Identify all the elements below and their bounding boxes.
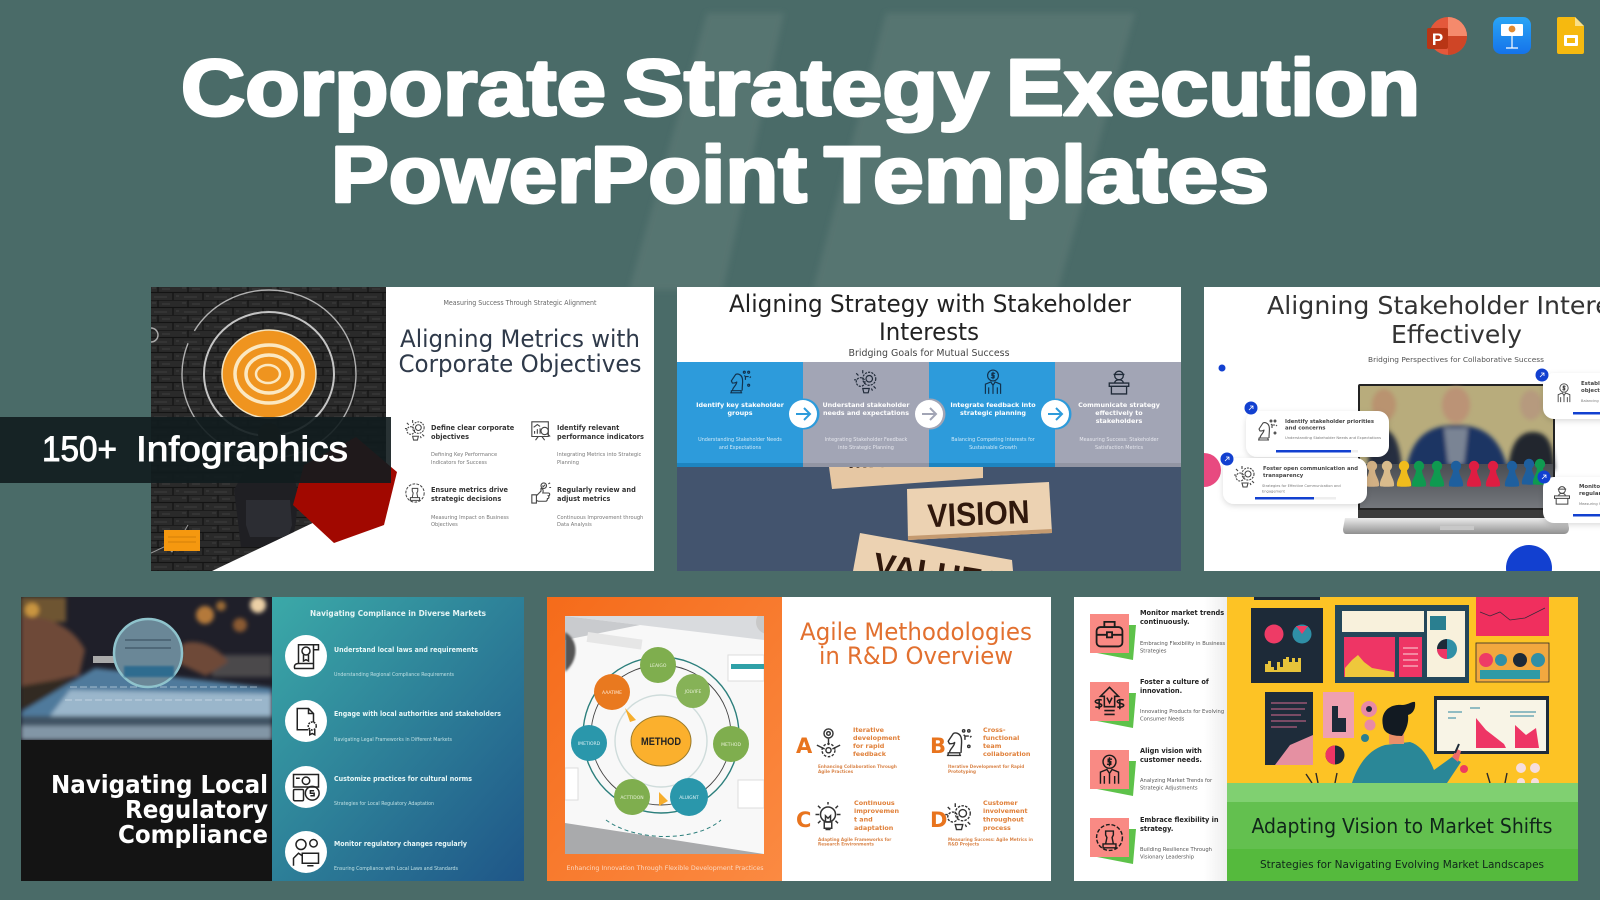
card: identify priorities: and concerns — [1285, 426, 1326, 432]
item 1 — [1090, 609, 1225, 660]
caption: Enhancing Innovation Through Flexible Development Practices — [566, 865, 764, 872]
item D: R&D Projects — [948, 842, 980, 846]
item: review metrics — [532, 483, 643, 528]
decorative dots — [1204, 364, 1552, 571]
step 4: effectively to — [1095, 409, 1143, 417]
item D: Measuring Success: Agile Metrics in — [948, 837, 1033, 842]
title block: Navigating Local — [51, 770, 268, 799]
card: identify priorities: Identify stakeholder priorities — [1285, 419, 1374, 425]
step 1 — [677, 362, 803, 467]
item 2 — [1090, 678, 1224, 728]
item 1: Monitor market trends — [1140, 609, 1224, 617]
method diagram: ALUIGNT — [679, 795, 699, 801]
step 1: groups — [727, 409, 753, 417]
panel: Aligning Metrics card — [144, 287, 654, 571]
background: faint diagonal slashes — [629, 13, 1135, 290]
item: review metrics: adjust metrics — [557, 495, 610, 503]
step 1: and Expectations — [719, 445, 762, 451]
item C: Adapting Agile Frameworks for — [818, 837, 892, 842]
method diagram: AAATIME — [602, 690, 622, 696]
title block: Compliance — [118, 820, 268, 849]
heading: Corporate Objectives — [398, 350, 642, 378]
item A: Agile Practices — [818, 769, 854, 774]
photo: wooden blocks: MISSION — [847, 443, 949, 474]
card: foster communication: Strategies for Effective Communication and — [1262, 484, 1341, 488]
step 2: needs and expectations — [823, 409, 909, 417]
item: define objectives: Define clear corporate — [431, 424, 515, 432]
item A: feedback — [853, 750, 887, 758]
heading — [398, 325, 642, 378]
panel: Local Regulatory Compliance card — [21, 597, 524, 881]
item C: t and — [854, 816, 873, 824]
illustration: analytics dashboards — [1227, 597, 1578, 786]
photo: wooden blocks: VISION — [927, 493, 1030, 534]
photo: brick wall with target — [144, 287, 386, 571]
item: review metrics: Data Analysis — [557, 522, 592, 528]
item: ensure metrics: strategic decisions — [431, 495, 501, 503]
item C — [796, 799, 899, 846]
step 2 — [803, 362, 929, 467]
item 2: Foster a culture of — [1140, 678, 1209, 686]
title band: Strategies for Navigating Evolving Market Landscapes — [1260, 858, 1544, 871]
item 4: Monitor regulatory changes regularly — [334, 840, 468, 848]
item A: Iterative — [853, 726, 885, 734]
item D: Customer — [983, 799, 1018, 807]
heading — [800, 618, 1032, 670]
method diagram: ACTTIDON — [620, 795, 644, 801]
banner: 150+ Infographics: Infographics — [136, 430, 348, 469]
item D: involvement — [983, 807, 1028, 815]
method diagram: METHOD — [641, 736, 681, 748]
icon: Keynote — [1493, 17, 1531, 54]
card: foster communication: Foster open communication and — [1263, 466, 1358, 472]
icon: Google Slides — [1557, 17, 1584, 54]
item: identify indicators: Integrating Metrics into Strategic — [557, 452, 642, 458]
item D: throughout — [983, 816, 1024, 824]
item 1: continuously. — [1140, 618, 1190, 626]
step 2: Integrating Stakeholder Feedback — [825, 437, 908, 443]
item D: process — [983, 824, 1011, 832]
item C: improvemen — [854, 807, 899, 815]
method diagram: LEAIGO — [650, 663, 667, 669]
item 3: Customize practices for cultural norms — [334, 775, 472, 783]
item A: development — [853, 734, 900, 742]
item 3: Analyzing Market Trends for — [1140, 778, 1213, 784]
card: foster communication: transparency — [1263, 473, 1304, 479]
arrow 2 — [914, 398, 946, 430]
subtitle: Bridging Goals for Mutual Success — [848, 348, 1010, 359]
banner: 150+ Infographics — [0, 417, 391, 483]
badge — [1244, 402, 1258, 414]
item 4 — [285, 831, 468, 873]
compliance panel — [272, 597, 524, 881]
item: identify indicators — [532, 422, 644, 466]
badge — [1538, 470, 1550, 484]
card: monitor regularly — [1543, 477, 1600, 523]
item: review metrics: Regularly review and — [557, 486, 636, 494]
step 2: into Strategic Planning — [838, 445, 894, 451]
card: identify priorities — [1246, 411, 1389, 457]
panel: Aligning Stakeholder card — [1204, 287, 1600, 571]
item: identify indicators: Identify relevant — [557, 424, 619, 432]
item 4: Ensuring Compliance with Local Laws and Standards — [334, 866, 458, 872]
step 1: Understanding Stakeholder Needs — [698, 437, 782, 443]
icon: PowerPoint — [1427, 17, 1467, 55]
heading: in R&D Overview — [819, 642, 1013, 670]
title band: Adapting Vision to Market Shifts — [1252, 814, 1552, 838]
item 3: Strategies for Local Regulatory Adaptation — [334, 801, 434, 807]
card: foster communication — [1223, 458, 1367, 504]
item: identify indicators: performance indicators — [557, 433, 644, 441]
item 2: innovation. — [1140, 687, 1182, 695]
step 4: stakeholders — [1096, 417, 1142, 425]
item 4: Building Resilience Through — [1140, 847, 1212, 853]
method diagram: JOLVIFE — [684, 689, 702, 695]
item D — [930, 799, 1033, 846]
item: identify indicators: Planning — [557, 460, 579, 466]
method diagram: METHOD — [721, 742, 741, 748]
item B: Cross- — [983, 726, 1006, 734]
title: Strategy — [623, 43, 990, 132]
item A: Enhancing Collaboration Through — [818, 764, 897, 769]
step 1: Identify key stakeholder — [696, 401, 785, 409]
card: identify priorities: Understanding Stakeholder Needs and Expectations — [1285, 436, 1381, 440]
item C: Continuous — [854, 799, 895, 807]
method diagram: IMETIORD — [578, 741, 601, 747]
panel heading: Navigating Compliance in Diverse Markets — [310, 609, 486, 618]
heading: Aligning Metrics with — [400, 325, 640, 353]
item 1: Embracing Flexibility in Business — [1140, 641, 1225, 647]
title: PowerPoint — [331, 130, 807, 219]
step 3: Integrate feedback into — [950, 401, 1036, 409]
item A — [796, 726, 900, 774]
title: Templates — [824, 130, 1269, 219]
item 1: Understand local laws and requirements — [334, 646, 478, 654]
item C: Research Environments — [818, 842, 874, 846]
step 3: strategic planning — [960, 409, 1026, 417]
step 4: Satisfaction Metrics — [1095, 445, 1143, 451]
heading: Aligning Strategy with Stakeholder — [729, 290, 1131, 318]
title: Execution — [1006, 43, 1420, 132]
title: Corporate — [181, 43, 606, 132]
photo: magnifying glass — [21, 597, 272, 740]
photo: wooden blocks: VALUES — [871, 545, 1006, 602]
item: review metrics: Continuous Improvement through — [557, 515, 643, 521]
heading: Interests — [879, 318, 979, 346]
item: ensure metrics: Ensure metrics drive — [431, 486, 509, 494]
panel: Adapting Vision card — [1074, 597, 1578, 881]
arrow 1 — [788, 398, 820, 430]
icon: PowerPoint: P — [1432, 30, 1443, 49]
item 2: Innovating Products for Evolving — [1140, 709, 1224, 715]
arrow 3 — [1040, 398, 1072, 430]
item B: Prototyping — [948, 769, 976, 774]
item: define objectives: objectives — [431, 433, 469, 441]
item 3: Align vision with — [1140, 747, 1202, 755]
item: define objectives: Indicators for Success — [431, 460, 487, 466]
item: ensure metrics — [406, 484, 509, 528]
step 4: Measuring Success: Stakeholder — [1079, 437, 1160, 443]
panel: Aligning Strategy card — [677, 287, 1181, 602]
heading: Agile Methodologies — [800, 618, 1032, 646]
item B: functional — [983, 734, 1019, 742]
item: ensure metrics: Objectives — [431, 522, 458, 528]
step 2: Understand stakeholder — [822, 401, 910, 409]
laptop photo — [1343, 384, 1569, 534]
step 3 — [929, 362, 1055, 467]
item 3 — [285, 766, 472, 808]
card: foster communication: Engagement — [1262, 490, 1286, 494]
item 1 — [285, 635, 478, 678]
item 3: Strategic Adjustments — [1140, 786, 1198, 792]
item B: collaboration — [983, 750, 1031, 758]
item B: B — [930, 734, 946, 758]
title — [181, 43, 1420, 219]
item D: D — [930, 808, 947, 832]
item 2: Consumer Needs — [1140, 716, 1185, 722]
item A: A — [796, 734, 813, 758]
item 4 — [1090, 816, 1219, 864]
panel: Agile Methodologies card — [547, 597, 1051, 881]
step 4 — [1055, 362, 1181, 467]
item A: for rapid — [853, 742, 885, 750]
item 1: Strategies — [1140, 648, 1167, 654]
item 4: strategy. — [1140, 825, 1173, 833]
step 4: Communicate strategy — [1078, 401, 1161, 409]
step 3: Sustainable Growth — [969, 445, 1017, 451]
item: ensure metrics: Measuring Impact on Business — [431, 515, 509, 521]
item 3 — [1090, 747, 1213, 796]
subtitle: Bridging Perspectives for Collaborative Success — [1368, 355, 1544, 364]
item 2: Navigating Legal Frameworks in Different Markets — [334, 737, 452, 743]
item 2: Engage with local authorities and stakeholders — [334, 710, 501, 718]
heading: Effectively — [1391, 320, 1522, 349]
heading — [1267, 291, 1600, 349]
photo: wooden blocks — [677, 467, 1181, 571]
title block — [21, 740, 272, 881]
method diagram — [565, 610, 780, 854]
step 3: Balancing Competing Interests for — [951, 437, 1036, 443]
item 4: Embrace flexibility in — [1140, 816, 1219, 824]
item 4: Visionary Leadership — [1140, 854, 1195, 860]
item C: adaptation — [854, 824, 894, 832]
item: define objectives — [405, 420, 515, 466]
subtitle: Measuring Success Through Strategic Alignment — [444, 299, 597, 307]
heading — [729, 294, 1131, 340]
badge — [1536, 368, 1548, 382]
item: define objectives: Defining Key Performance — [431, 452, 497, 458]
badge — [1220, 452, 1234, 466]
item C: C — [796, 808, 811, 832]
title band — [1227, 783, 1578, 881]
item B — [930, 726, 1031, 774]
item 3: customer needs. — [1140, 756, 1202, 764]
item B: Iterative Development for Rapid — [948, 764, 1024, 769]
card: establish objectives — [1543, 373, 1600, 419]
title block: Regulatory — [125, 795, 268, 824]
hexagon accent — [293, 437, 397, 543]
item 1: Understanding Regional Compliance Requirements — [334, 672, 454, 678]
orange image panel — [547, 597, 782, 881]
item B: team — [983, 742, 1002, 750]
banner: 150+ Infographics: 150+ — [42, 430, 117, 469]
item 2 — [285, 700, 501, 743]
